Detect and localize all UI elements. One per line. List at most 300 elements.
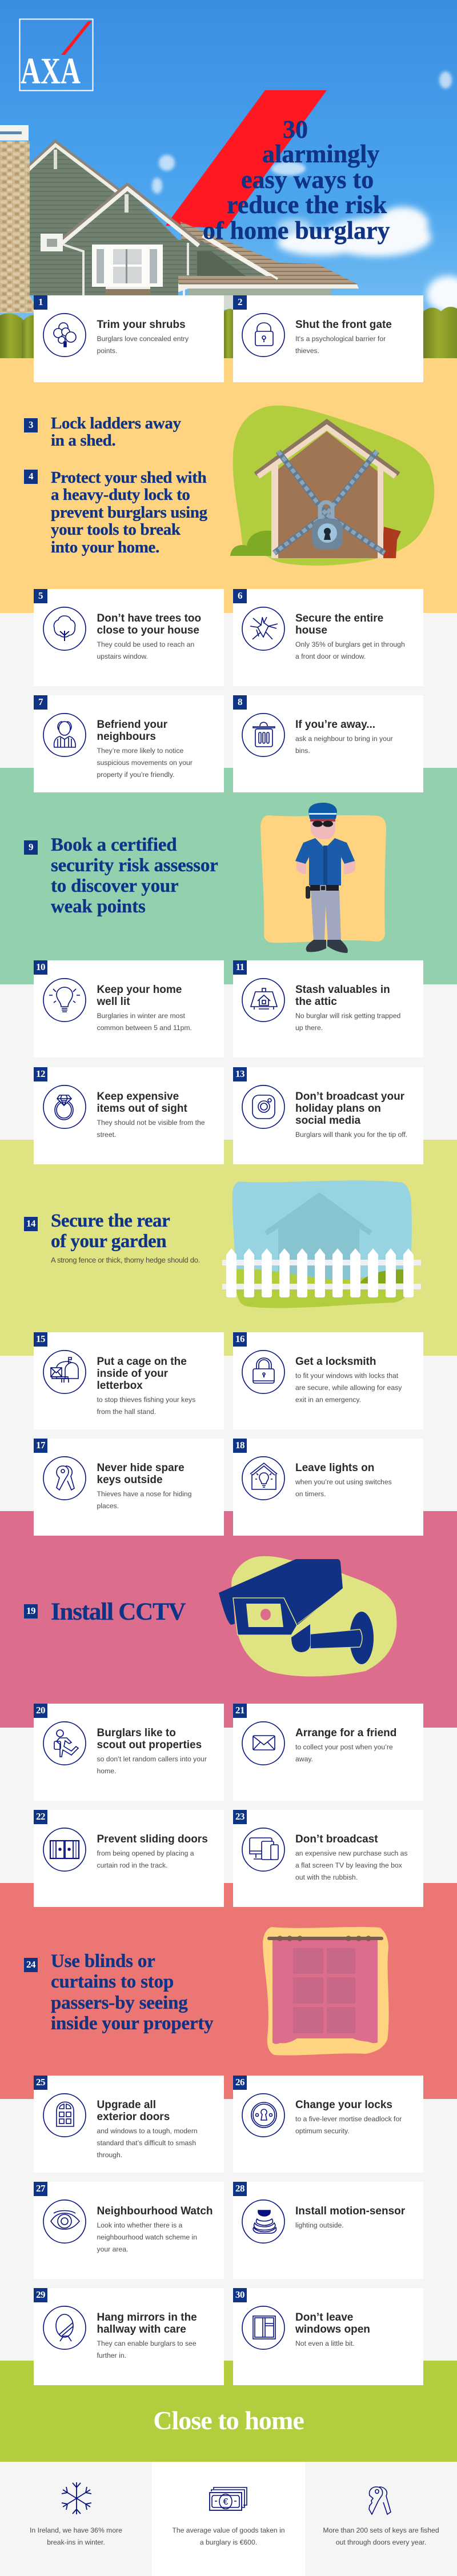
card 27 text: Look into whether there is a (97, 2221, 182, 2229)
card 12 text: street. (97, 1131, 116, 1139)
heading 4: into your home. (51, 538, 159, 556)
badge 10 (34, 960, 47, 975)
card 8 text: bins. (295, 747, 310, 755)
badge 22 (34, 1810, 47, 1824)
small window (41, 234, 63, 251)
card 18 text: on timers. (295, 1490, 326, 1498)
chimney (0, 141, 34, 313)
badge 7: 7 (38, 696, 43, 707)
fact 3: keys fished out (305, 2462, 457, 2576)
icon: tree cluster (43, 313, 86, 357)
dark bush (360, 1269, 404, 1283)
card 29 (34, 2288, 224, 2385)
heading 24 (51, 1951, 213, 2034)
fact 2: average value, white column (152, 2462, 305, 2576)
badge 21 (233, 1704, 247, 1717)
heading 4 (51, 468, 207, 556)
badge 1 (34, 295, 47, 310)
hedge (0, 307, 457, 358)
card 27 text: neighbourhood watch scheme in (97, 2233, 197, 2241)
fact 1 text: In Ireland, we have 36% more (30, 2526, 122, 2534)
icon: sliding doors (43, 1828, 86, 1872)
card 26 text: optimum security. (295, 2127, 350, 2135)
badge 27 (34, 2182, 47, 2196)
card 30 (233, 2288, 423, 2385)
card 22 (34, 1810, 224, 1907)
icon: tree (43, 607, 86, 651)
badge 14 (24, 1217, 38, 1231)
badge 13 (233, 1067, 247, 1081)
heading 4: prevent burglars using (51, 503, 207, 522)
card 7 text: Befriend your (97, 719, 167, 731)
fact 1: winter break-ins (0, 2462, 152, 2576)
card 21 (233, 1704, 423, 1801)
sunglasses (312, 820, 333, 827)
badge 20 (34, 1704, 47, 1717)
band: yellow fence section (0, 1140, 457, 1356)
card 1 (34, 295, 224, 382)
card 25 text (97, 2099, 224, 2161)
card 10 text (97, 984, 192, 1032)
card 25 text: standard that’s difficult to smash (97, 2139, 196, 2147)
card 26 text (295, 2099, 422, 2137)
card 29 text (97, 2311, 224, 2362)
chains (274, 451, 384, 553)
card 15 text: from the hall stand. (97, 1408, 156, 1416)
band: orange shed section (0, 358, 457, 613)
badge 26 (233, 2076, 247, 2090)
heading 24: inside your property (51, 2013, 213, 2034)
card 30 text: windows open (295, 2323, 370, 2335)
card 1 text: Trim your shrubs (97, 319, 186, 331)
title: easy ways to (241, 166, 374, 194)
card 25 (34, 2076, 224, 2173)
badge 18 (233, 1439, 247, 1452)
card 17 text: keys outside (97, 1474, 163, 1486)
card 13 text: Don’t broadcast your (295, 1091, 404, 1103)
bush (230, 531, 275, 556)
card 15 text: letterbox (97, 1380, 143, 1392)
icon: eye (43, 2200, 86, 2244)
band: coral curtains section (0, 1883, 457, 2099)
icon: attic (242, 978, 285, 1022)
badge 22: 22 (36, 1811, 45, 1822)
card 12 text: They should not be visible from the (97, 1119, 205, 1127)
card 11 text: No burglar will risk getting trapped (295, 1012, 400, 1020)
house (0, 125, 359, 313)
card 10 text: Keep your home (97, 984, 182, 996)
badge 30 (233, 2288, 247, 2302)
badge 2: 2 (238, 297, 242, 307)
badge 29 (34, 2288, 47, 2302)
card 2 (233, 295, 423, 382)
icon: window (241, 2306, 284, 2350)
card 6 text: house (295, 624, 327, 636)
icon: diamond ring (43, 1085, 86, 1129)
badge 26: 26 (235, 2077, 244, 2088)
card 23 text: an expensive new purchase such as (295, 1849, 407, 1857)
heading 4: your tools to break (51, 520, 181, 539)
heading 4: Protect your shed with (51, 468, 206, 487)
panes (293, 1948, 355, 2033)
card 15 text: to stop thieves fishing your keys (97, 1396, 195, 1404)
icon: euro notes: € (223, 2497, 228, 2507)
card 20 text (97, 1727, 224, 1777)
badge 4 (24, 470, 38, 483)
badge 2 (233, 295, 247, 310)
badge 6: 6 (238, 590, 242, 601)
band: pink CCTV section (0, 1511, 457, 1728)
title (203, 115, 390, 245)
icon: snowflake (60, 2481, 93, 2515)
title: alarmingly (262, 140, 379, 168)
badge 3 (24, 418, 38, 432)
badge 30: 30 (235, 2289, 244, 2300)
card 13 text (295, 1091, 407, 1139)
card 5 text (97, 612, 201, 660)
icon: devices (241, 1828, 284, 1872)
card 22 text: curtain rod in the track. (97, 1861, 167, 1869)
band: green close to home section (0, 2361, 457, 2462)
arms (296, 860, 355, 874)
card 22 text: from being opened by placing a (97, 1849, 194, 1857)
badge 17: 17 (36, 1440, 45, 1451)
card 22 text: Prevent sliding doors (97, 1833, 208, 1845)
badge 12: 12 (36, 1068, 45, 1079)
card 17 text (97, 1462, 224, 1512)
card 18 text (295, 1462, 422, 1500)
card 8 text: If you’re away... (295, 719, 375, 731)
badge 16 (233, 1332, 247, 1346)
card 26 text: to a five-lever mortise deadlock for (295, 2115, 402, 2123)
card 11 text: the attic (295, 996, 337, 1008)
badge 1: 1 (38, 297, 43, 307)
icon: running burglar (43, 1721, 86, 1765)
card 13 text: holiday plans on (295, 1103, 381, 1115)
front gable wall (73, 189, 178, 295)
sky (0, 0, 457, 358)
card 6 text: Secure the entire (295, 612, 383, 624)
icon: motion sensor (241, 2200, 284, 2244)
card 7 text: property if you’re friendly. (97, 771, 174, 779)
icon: envelope (241, 1721, 284, 1765)
heading 9: weak points (51, 896, 146, 917)
cap (308, 803, 337, 819)
gutters (63, 245, 83, 295)
card 6 text: a front door or window. (295, 652, 366, 660)
card 23 (233, 1810, 423, 1907)
heading 3: Lock ladders away (51, 414, 181, 432)
card 10 text: common between 5 and 11pm. (97, 1024, 192, 1032)
card 7 (34, 695, 224, 792)
white roof fascia (203, 235, 277, 280)
card 2 text: thieves. (295, 347, 319, 355)
card 28 text: lighting outside. (295, 2221, 344, 2229)
card 8 (233, 695, 423, 792)
card 8 text: ask a neighbour to bring in your (295, 735, 393, 743)
card 20 text: scout out properties (97, 1739, 202, 1751)
heading 14: Secure the rear (51, 1211, 170, 1231)
card 30 text: Not even a little bit. (295, 2339, 355, 2347)
card 23 text: Don’t broadcast (295, 1833, 378, 1845)
card 13 text: social media (295, 1115, 360, 1127)
card 21 text: Arrange for a friend (295, 1727, 396, 1739)
card 2 text (295, 319, 392, 355)
illustration: chained shed (230, 406, 434, 566)
badge 24 (24, 1958, 38, 1972)
card 25 text: Upgrade all (97, 2099, 156, 2111)
pale wall between cards (224, 295, 233, 310)
card 16 text: are secure, while allowing for easy (295, 1384, 402, 1392)
padlock (320, 502, 332, 521)
icon: neighbour (43, 713, 86, 757)
card 1 text: Burglars love concealed entry (97, 335, 189, 343)
heading 9 (50, 835, 218, 917)
heading 3: in a shed. (51, 431, 115, 450)
heading row: item 9 (24, 835, 218, 917)
icon: mailbox (43, 1350, 86, 1394)
badge 20: 20 (36, 1705, 45, 1716)
card 21 text (295, 1727, 422, 1765)
card 15 (34, 1332, 224, 1429)
card 27 text: Neighbourhood Watch (97, 2205, 213, 2217)
badge 29: 29 (36, 2289, 45, 2300)
card 5 text: close to your house (97, 624, 199, 636)
card 29 text: They can enable burglars to see (97, 2339, 197, 2347)
card 17 (34, 1439, 224, 1536)
shoes (306, 940, 348, 953)
lawn (235, 1269, 411, 1308)
fact 1 text: break-ins in winter. (47, 2538, 105, 2546)
icon: keyhole (241, 2093, 284, 2137)
card 5 (34, 589, 224, 686)
card 25 text: exterior doors (97, 2111, 170, 2123)
shed wall (275, 431, 378, 558)
curtain (272, 1940, 378, 2044)
icon: padlock (242, 1350, 285, 1394)
badge 14: 14 (26, 1218, 35, 1229)
card 12 text (97, 1091, 205, 1139)
icon: mirror (43, 2306, 86, 2350)
badge 8: 8 (238, 696, 242, 707)
badge 18: 18 (235, 1440, 244, 1451)
card 16 (233, 1332, 423, 1429)
fact 3 text: More than 200 sets of keys are fished (323, 2526, 439, 2534)
fence (222, 1248, 421, 1297)
red AXA slash (166, 90, 327, 229)
card 15 text (97, 1356, 195, 1416)
card 2 text: Shut the front gate (295, 319, 392, 331)
card 13 (233, 1067, 423, 1164)
card 5 text: upstairs window. (97, 652, 148, 660)
card 16 text: exit in an emergency. (295, 1396, 361, 1404)
card 28 text: Install motion-sensor (295, 2205, 405, 2217)
card 10 text: well lit (97, 996, 130, 1008)
illustration: security guard (260, 803, 386, 953)
card 12 (34, 1067, 224, 1164)
card 12 text: items out of sight (97, 1103, 187, 1115)
card 6 text: Only 35% of burglars get in through (295, 640, 405, 648)
card 10 (34, 960, 224, 1057)
shirt (295, 838, 355, 886)
badge 3: 3 (29, 419, 33, 430)
illustration: fence and house (222, 1180, 421, 1308)
fact 3 text: out through doors every year. (336, 2538, 426, 2546)
badge 15 (34, 1332, 47, 1346)
badge 15: 15 (36, 1333, 45, 1344)
porch roof (177, 276, 357, 285)
badge 25: 25 (36, 2077, 45, 2088)
belt (310, 885, 339, 891)
card 25 text: and windows to a tough, modern (97, 2127, 198, 2135)
heading 19: Install CCTV (51, 1599, 185, 1625)
fact 2 text: The average value of goods taken in (172, 2526, 285, 2534)
AXA logo (19, 18, 94, 92)
card 7 text: They’re more likely to notice (97, 747, 183, 755)
card 1 text: points. (97, 347, 117, 355)
card 1 text (97, 319, 189, 355)
fact 1 text (0, 2525, 152, 2549)
badge 13: 13 (235, 1068, 244, 1079)
card 21 text: to collect your post when you’re (295, 1743, 393, 1751)
card 15 text: Put a cage on the (97, 1356, 187, 1368)
illustration: CCTV camera (219, 1556, 396, 1676)
card 11 text: up there. (295, 1024, 323, 1032)
badge 24: 24 (26, 1959, 35, 1970)
card 23 text (295, 1833, 422, 1884)
icon: instagram (242, 1085, 285, 1129)
fact 2 text: a burglary is €600. (200, 2538, 257, 2546)
subtext 14: A strong fence or thick, thorny hedge should do. (51, 1256, 200, 1264)
card 20 text: home. (97, 1767, 116, 1775)
trousers (311, 890, 341, 942)
sill and door head (106, 287, 150, 289)
card 2 text: It's a psychological barrier for (295, 335, 386, 343)
card 26 (233, 2076, 423, 2173)
badge 23: 23 (235, 1811, 244, 1822)
badge 12 (34, 1067, 47, 1081)
badge 4: 4 (29, 471, 33, 482)
badge 10: 10 (36, 962, 45, 972)
heading 9: Book a certified (51, 835, 177, 855)
badge 11 (233, 960, 247, 975)
card 11 text: Stash valuables in (295, 984, 390, 996)
card 30 text (295, 2311, 422, 2350)
card 17 text: places. (97, 1502, 119, 1510)
heading 24: curtains to stop (51, 1972, 174, 1992)
icon: house with bulb (241, 1456, 284, 1500)
card 7 text: neighbours (97, 731, 156, 743)
heading 4: a heavy-duty lock to (51, 486, 190, 504)
card 18 (233, 1439, 423, 1536)
badge 28 (233, 2182, 247, 2196)
badge 5 (34, 589, 47, 603)
badge 25 (34, 2076, 47, 2090)
heading 3 (51, 414, 181, 450)
card 18 text: Leave lights on (295, 1462, 374, 1474)
badge 11: 11 (235, 962, 244, 972)
badge 17 (34, 1439, 47, 1452)
card 27 text (97, 2205, 224, 2255)
card 13 text: Burglars will thank you for the tip off. (295, 1131, 407, 1139)
card 16 text: to fit your windows with locks that (295, 1372, 398, 1380)
icon: light bulb (43, 978, 86, 1022)
card 6 (233, 589, 423, 686)
heading 14: of your garden (51, 1231, 166, 1252)
heading 24: Use blinds or (51, 1951, 155, 1972)
icon: padlock (242, 313, 285, 357)
card 12 text: Keep expensive (97, 1091, 179, 1103)
card 10 text: Burglaries in winter are most (97, 1012, 185, 1020)
card 22 text (97, 1833, 224, 1872)
card 23 text: out with the rubbish. (295, 1873, 358, 1881)
card 21 text: away. (295, 1755, 313, 1763)
card 23 text: a flat screen TV by leaving the box (295, 1861, 402, 1869)
card 17 text: Never hide spare (97, 1462, 185, 1474)
icon: euro notes (209, 2487, 248, 2511)
badge 7 (34, 695, 47, 710)
clouds (152, 71, 457, 313)
badge 6 (233, 589, 247, 603)
card 26 text: Change your locks (295, 2099, 392, 2111)
fact 3 text (305, 2525, 457, 2549)
title: reduce the risk (227, 191, 387, 219)
badge 9 (24, 840, 38, 855)
badge 19: 19 (26, 1605, 35, 1616)
card 5 text: They could be used to reach an (97, 640, 194, 648)
heading 24: passers-by seeing (51, 1993, 188, 2013)
card 15 text: inside of your (97, 1368, 168, 1380)
roof (255, 422, 399, 474)
icon: bin (242, 713, 285, 757)
card 6 text (295, 612, 405, 660)
card 16 text: Get a locksmith (295, 1356, 376, 1368)
hero photo: house against blue sky (0, 0, 457, 358)
main tan roof (181, 222, 357, 284)
card 7 text: suspicious movements on your (97, 759, 193, 767)
badge 19 (24, 1604, 38, 1618)
badge 27: 27 (36, 2183, 45, 2194)
house silhouette (264, 1192, 372, 1283)
card 8 text (295, 719, 393, 755)
heading: close to home: Close to home (153, 2406, 304, 2435)
icon: broken glass (242, 607, 285, 651)
badge 16: 16 (235, 1333, 244, 1344)
card 20 text: Burglars like to (97, 1727, 176, 1739)
card 20 text: so don’t let random callers into your (97, 1755, 207, 1763)
card 29 text: Hang mirrors in the (97, 2311, 197, 2323)
card 7 text (97, 719, 193, 779)
card 11 (233, 960, 423, 1057)
heading row: item 19 (24, 1599, 230, 1626)
heading row: items 3 (24, 414, 181, 450)
icon: arched door (43, 2093, 86, 2137)
icon: keys (43, 1456, 86, 1500)
rod (267, 1937, 383, 1940)
card 28 text (295, 2205, 422, 2232)
badge 9: 9 (29, 842, 33, 852)
card 20 (34, 1704, 224, 1801)
heading 9: security risk assessor (51, 855, 218, 876)
badge 23 (233, 1810, 247, 1824)
card 27 (34, 2182, 224, 2279)
fact 2 text (152, 2525, 305, 2549)
card 29 text: hallway with care (97, 2323, 186, 2335)
heading row: item 4 (24, 468, 207, 556)
rear gable wall (29, 143, 119, 295)
title: of home burglary (203, 217, 390, 245)
card 18 text: when you’re out using switches (295, 1478, 392, 1486)
